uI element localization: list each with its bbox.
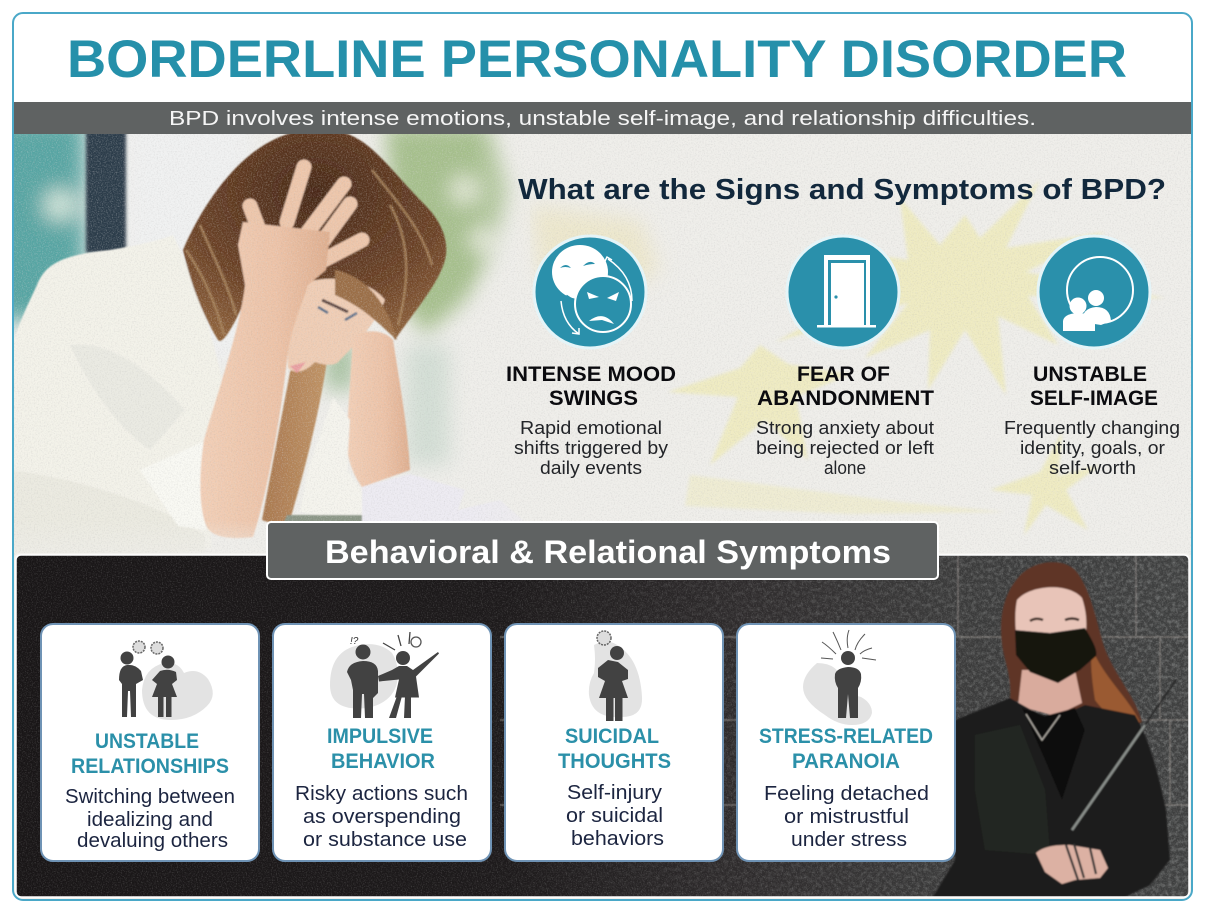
photo: stressed woman holding her head <box>13 129 1192 560</box>
hair <box>1001 562 1142 726</box>
label: unstable self-image: SELF-IMAGE <box>1030 387 1158 410</box>
subtitle band: BPD involves intense emotions, unstable self-image, and relationship difficulties. <box>169 108 1036 130</box>
text: fear of abandonment description: Strong anxiety about <box>756 418 934 438</box>
text: fear of abandonment description <box>756 418 934 478</box>
papers on the table <box>362 476 450 521</box>
stick <box>1072 725 1145 830</box>
card: impulsive behavior <box>273 624 491 861</box>
text: unstable relationships description: Switching between <box>65 786 235 808</box>
text: fear of abandonment description: being rejected or left <box>756 438 934 458</box>
title: BORDERLINE PERSONALITY DISORDER <box>67 30 1127 89</box>
text: stress-related paranoia description: under stress <box>791 829 907 851</box>
text: unstable relationships description: devaluing others <box>77 830 228 852</box>
subtitle band <box>13 102 1192 134</box>
label: fear of abandonment <box>757 363 934 410</box>
panel: unstable self-image <box>1004 236 1180 478</box>
label: fear of abandonment: FEAR OF <box>797 363 890 386</box>
right sleeve <box>316 398 361 516</box>
text: impulsive behavior description: Risky actions such <box>295 783 468 805</box>
icon: arguing couple <box>119 641 213 720</box>
icon: shouting couple <box>330 632 439 718</box>
card: stress-related paranoia <box>737 624 955 861</box>
label: unstable relationships <box>71 730 229 778</box>
label: intense mood swings <box>506 363 676 410</box>
text: unstable self-image description: self-worth <box>1049 458 1136 478</box>
text: suicidal thoughts description: or suicidal <box>566 805 663 827</box>
heading: behavioral and relational symptoms <box>267 522 938 579</box>
card: unstable relationships <box>41 624 259 861</box>
hair mass <box>183 129 446 341</box>
label: unstable self-image: UNSTABLE <box>1033 363 1147 386</box>
text: suicidal thoughts description: behaviors <box>571 828 664 850</box>
illustration: yellow paint splatter <box>668 180 1165 535</box>
neck <box>1018 670 1082 716</box>
card: suicidal thoughts <box>505 624 723 861</box>
text: intense mood swings description: shifts triggered by <box>514 438 668 458</box>
text: intense mood swings description: daily events <box>540 458 642 478</box>
text: stress-related paranoia description <box>764 783 929 851</box>
label: intense mood swings: INTENSE MOOD <box>506 363 676 386</box>
label: unstable self-image <box>1030 363 1158 410</box>
label: stress-related paranoia <box>759 725 933 773</box>
icon: people in mirror <box>1038 236 1150 348</box>
hand <box>1036 845 1108 884</box>
right arm <box>347 331 410 487</box>
label: unstable relationships: RELATIONSHIPS <box>71 755 229 778</box>
jacket <box>933 698 1170 897</box>
label: stress-related paranoia: PARANOIA <box>792 750 900 773</box>
label: suicidal thoughts: THOUGHTS <box>558 750 671 773</box>
icon: door <box>787 236 899 348</box>
panel: hero background <box>0 120 1192 559</box>
mask <box>1015 628 1096 683</box>
heading: behavioral and relational symptoms: Behavioral & Relational Symptoms <box>325 534 891 570</box>
text: unstable self-image description <box>1004 418 1180 478</box>
text: unstable relationships description: idealizing and <box>87 809 213 831</box>
panel: intense mood swings <box>506 236 676 478</box>
text: suicidal thoughts description: Self-injury <box>567 782 662 804</box>
label: impulsive behavior: IMPULSIVE <box>327 725 433 748</box>
text: unstable relationships description <box>65 786 235 852</box>
text: stress-related paranoia description: or mistrustful <box>784 806 909 828</box>
heading: signs and symptoms: What are the Signs and Symptoms of BPD? <box>518 174 1166 206</box>
text: fear of abandonment description: alone <box>824 458 866 478</box>
icon: shouting couple: !? <box>350 636 359 647</box>
face <box>1015 587 1086 634</box>
panel: behavioral background <box>14 553 1191 899</box>
text: impulsive behavior description: as overspending <box>303 806 461 828</box>
label: fear of abandonment: ABANDONMENT <box>757 387 934 410</box>
label: stress-related paranoia: STRESS-RELATED <box>759 725 933 748</box>
left arm and hand <box>200 167 362 538</box>
label: impulsive behavior <box>327 725 435 773</box>
shirt <box>16 246 210 340</box>
photo: woman in black mask <box>933 562 1176 897</box>
text: unstable self-image description: Frequently changing <box>1004 418 1180 438</box>
label: suicidal thoughts: SUICIDAL <box>565 725 659 748</box>
text: intense mood swings description <box>514 418 668 478</box>
label: intense mood swings: SWINGS <box>549 387 638 410</box>
text: unstable self-image description: identity, goals, or <box>1020 438 1165 458</box>
header: title background <box>13 13 1192 102</box>
text: stress-related paranoia description: Feeling detached <box>764 783 929 805</box>
brick wall mortar <box>500 555 1189 805</box>
label: unstable relationships: UNSTABLE <box>95 730 199 753</box>
icon: comedy and tragedy masks <box>534 236 646 348</box>
panel: fear of abandonment <box>756 236 934 478</box>
icon: anxious man with radiating arrows <box>803 630 876 725</box>
icon: distressed woman <box>589 631 642 721</box>
long hair <box>261 361 327 522</box>
text: intense mood swings description: Rapid emotional <box>520 418 662 438</box>
text: impulsive behavior description <box>295 783 468 851</box>
label: suicidal thoughts <box>558 725 671 773</box>
label: impulsive behavior: BEHAVIOR <box>331 750 435 773</box>
face <box>288 279 385 372</box>
text: suicidal thoughts description <box>566 782 664 850</box>
text: impulsive behavior description: or substance use <box>303 829 467 851</box>
